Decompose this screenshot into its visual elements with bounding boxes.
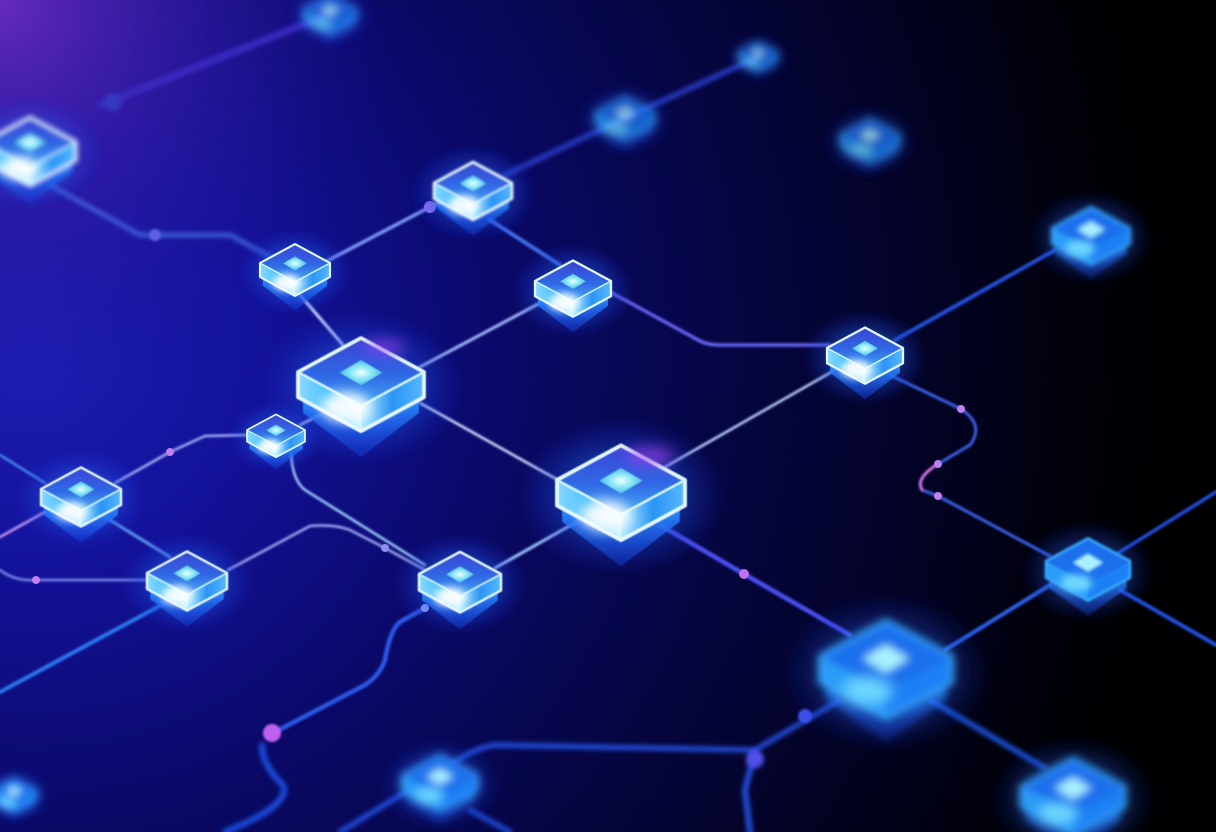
connection lines: in-focus traces: [0, 197, 1216, 732]
node: foreground bottom right: [990, 737, 1156, 832]
node: lower left: [121, 533, 253, 633]
node: upper left: [237, 228, 353, 316]
node: top centre: [409, 144, 537, 242]
purple highlights on main blocks: [365, 340, 674, 465]
node: foreground bottom centre: [379, 739, 501, 830]
node: right of centre: [802, 310, 928, 405]
node: large top-left: [0, 96, 106, 211]
node: main centre block: [515, 416, 727, 576]
node: far left: [15, 449, 147, 549]
node: right: [1021, 521, 1155, 622]
node: large foreground right: [780, 593, 992, 752]
node: top right: [1029, 191, 1153, 285]
far background nodes: [287, 0, 918, 177]
node: main left block: [257, 309, 465, 466]
connector dots: [32, 93, 965, 768]
node: upper centre: [510, 243, 636, 338]
node: small junction: [228, 401, 324, 474]
node: foreground bottom left: [0, 768, 51, 823]
node: lower centre: [392, 533, 528, 636]
